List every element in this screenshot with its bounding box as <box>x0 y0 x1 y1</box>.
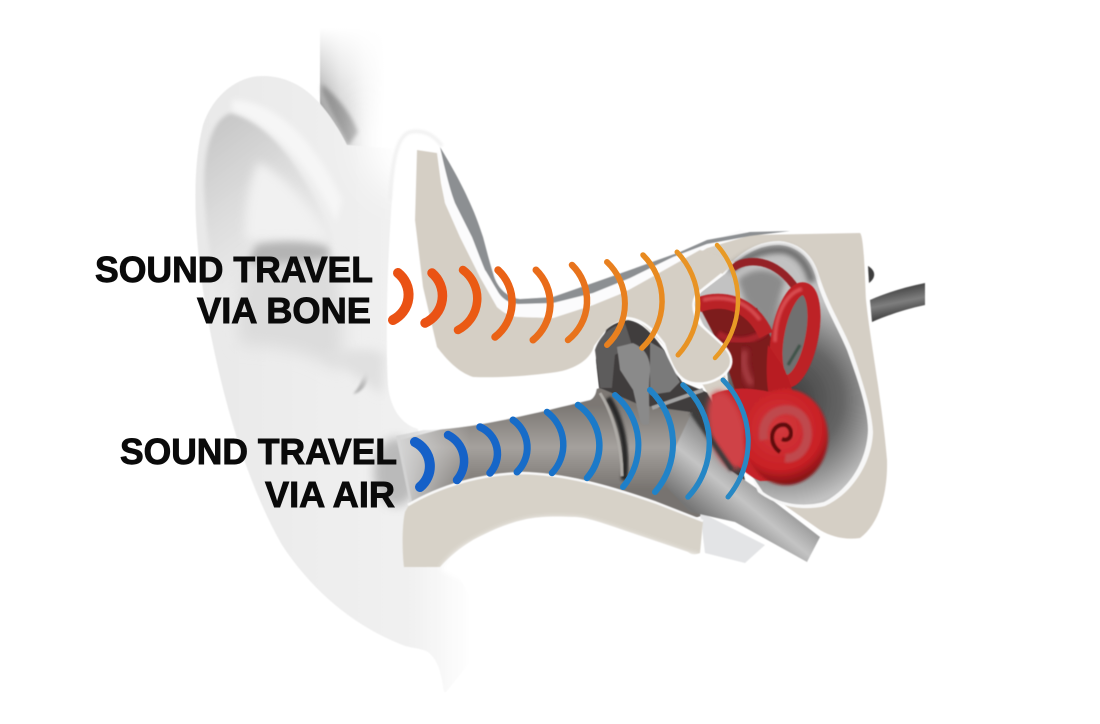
arc 2 <box>448 435 464 480</box>
shadow fade toward the top <box>314 18 392 126</box>
arc 10 <box>723 380 748 497</box>
superior canal arc <box>733 262 797 290</box>
ear canal tube <box>400 388 763 520</box>
dark middle ear backdrop <box>594 320 745 480</box>
blue arcs: sound via air <box>415 380 748 497</box>
arc 3 <box>480 427 497 473</box>
arc 1 <box>393 273 409 320</box>
arc 8 <box>642 255 662 348</box>
dark concha band <box>248 242 330 264</box>
label: sound travel via bone <box>95 249 373 331</box>
eardrum light edge <box>600 393 622 476</box>
tube to the throat <box>660 412 820 562</box>
arc 2 <box>425 273 442 323</box>
horizontal canal highlight <box>703 298 760 320</box>
cavity top shadow <box>730 250 812 282</box>
antitragus soft fold <box>320 349 385 395</box>
arc 3 <box>458 270 477 330</box>
arc 5 <box>533 270 550 340</box>
bone nub near the middle ear <box>620 250 735 383</box>
arc 7 <box>607 262 625 345</box>
white strip under membrane <box>437 150 755 318</box>
arc 8 <box>650 390 673 492</box>
arc 1 <box>415 442 430 487</box>
dark wedge at helix root <box>322 84 358 146</box>
canal stem <box>767 345 795 400</box>
arc 7 <box>615 395 638 487</box>
clip bump <box>868 266 874 283</box>
arc 6 <box>578 405 599 478</box>
label line 2: VIA BONE <box>197 290 371 331</box>
lower bone top highlight <box>408 473 703 521</box>
lower bone <box>403 473 703 567</box>
grey membrane strip along bone <box>440 147 790 304</box>
white rim of nub <box>625 274 731 384</box>
shading toward canal entrance <box>374 438 418 506</box>
cable and rear clip <box>868 266 925 322</box>
inner cavity <box>693 245 868 505</box>
cable <box>870 283 925 322</box>
helix bright rim <box>232 100 342 222</box>
arc 4 <box>495 270 512 337</box>
horizontal canal <box>698 301 766 335</box>
orange arcs: sound via bone <box>393 245 738 358</box>
upper white section <box>387 133 606 430</box>
upper bone <box>415 150 887 539</box>
arc 10 <box>715 245 738 358</box>
cross-section: bone, canal and inner ear <box>387 131 887 563</box>
inner ear: semicircular canals and cochlea <box>698 262 828 485</box>
soft lighter vestibule stripes <box>744 350 752 385</box>
helix inner fold shadow <box>204 113 332 345</box>
oval window sac <box>700 387 754 473</box>
arc 6 <box>568 265 587 340</box>
arc 9 <box>677 252 698 355</box>
arc 5 <box>547 412 563 473</box>
inner antihelix light area <box>246 162 326 240</box>
ring highlight <box>775 289 802 342</box>
concha shadow <box>238 258 342 372</box>
lower crease <box>353 356 371 394</box>
red body joining sac and cochlea <box>712 389 790 481</box>
label line 1: SOUND TRAVEL <box>120 431 397 472</box>
ear: outer ear illustration <box>195 76 472 692</box>
malleus <box>617 343 650 425</box>
head shadow behind ear <box>314 18 392 155</box>
middle ear: ossicles and eardrum <box>403 250 735 600</box>
cochlea inner fold <box>763 410 807 458</box>
upper white section halo <box>390 131 442 200</box>
top right fade to white <box>364 85 460 195</box>
white area under lower bone <box>440 518 705 600</box>
left hollow <box>595 323 632 388</box>
inner gray behind canals <box>738 270 785 330</box>
eardrum dark backing <box>608 398 625 480</box>
stapes rod <box>652 390 703 408</box>
label: sound travel via air <box>120 431 397 515</box>
arc 9 <box>683 385 709 497</box>
posterior canal ring <box>769 286 821 384</box>
vestibule <box>700 308 775 400</box>
ear silhouette <box>195 76 472 692</box>
label line 1: SOUND TRAVEL <box>95 249 373 290</box>
arc 4 <box>513 420 527 472</box>
canal fade at entrance <box>396 420 470 505</box>
grey panel right of malleus <box>650 342 680 395</box>
dark band beside tube <box>692 412 732 470</box>
cochlea outer turn <box>744 389 828 485</box>
light flap below canal <box>700 512 765 563</box>
cochlea spiral <box>772 425 791 452</box>
ring interior stripe <box>788 345 800 365</box>
inner cavity white rim <box>690 241 873 508</box>
shadow body <box>320 25 386 155</box>
ring interior fill <box>773 291 817 379</box>
second lower canal fold <box>718 332 765 341</box>
label line 2: VIA AIR <box>265 474 395 515</box>
